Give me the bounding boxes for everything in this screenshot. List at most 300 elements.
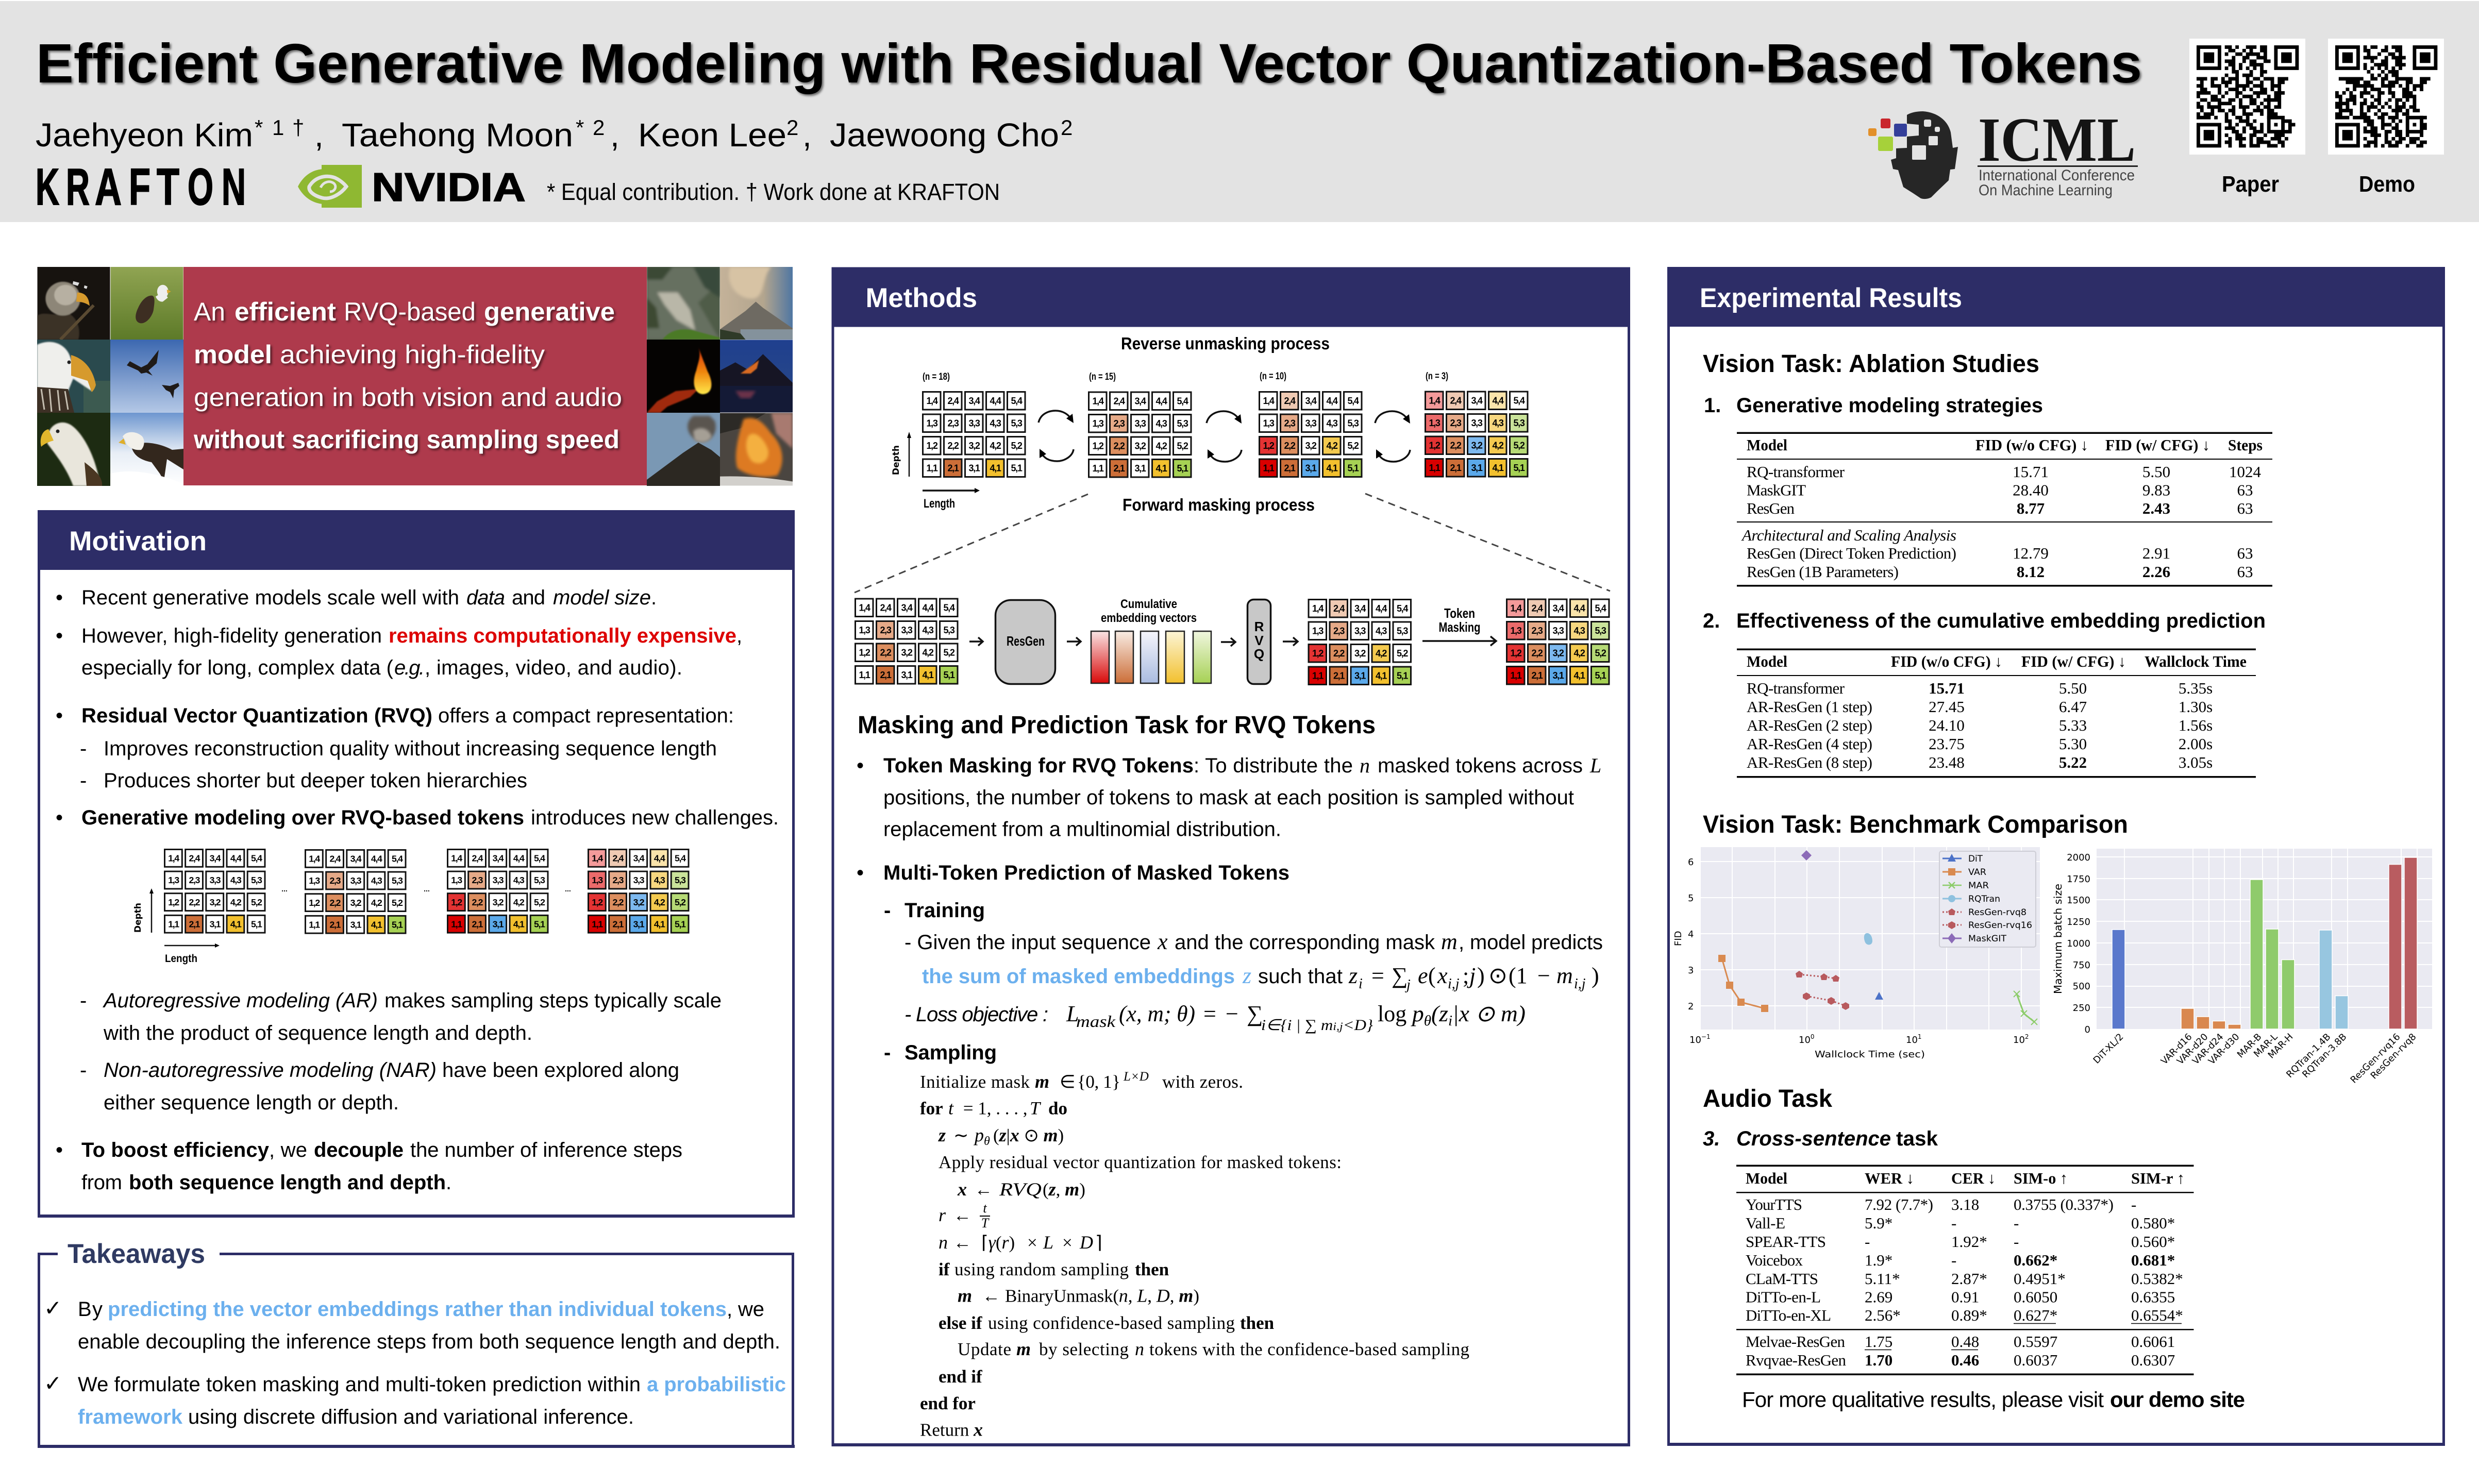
grid: autoregressive state 1: 3,4 [210,853,221,864]
grid: autoregressive state 2: 5,2 [392,898,403,908]
series: resgen-rvq16 [1803,992,1849,1010]
grid: n = 3: 5,3 [1513,418,1525,428]
authors: Keon Lee [638,116,786,154]
table: cross-sentence task: SIM-o ↑ [2014,1169,2068,1187]
panel: experimental results [1667,267,2445,1446]
legend: VAR [1968,867,1986,878]
bars: cumulative embedding vectors [1091,631,1211,683]
table: cumulative embedding prediction: AR-ResGen (2 step) [1747,716,1872,734]
header band [0,1,2479,222]
axis: length: Length [924,497,955,511]
grid: pipeline input: 1,2 [859,647,870,657]
grid: autoregressive state 1: 5,1 [251,919,262,929]
series: mar [2014,991,2037,1025]
algorithm: sampling: by selecting [1039,1339,1129,1359]
grid: n = 15: 4,2 [1155,441,1167,451]
grid: autoregressive state 2: 4,1 [371,919,382,930]
grid: n = 15: 1,3 [1092,418,1104,429]
takeaway 1 [44,1295,780,1353]
grid: pipeline input [856,599,958,684]
x axis model labels: DiT-XL/2 [2091,1032,2126,1066]
grid: autoregressive state 2: 5,1 [392,919,403,930]
axis: depth: Depth [891,445,901,475]
table: cross-sentence task: Model [1746,1169,1787,1187]
bars: var [2181,1008,2241,1029]
table: cross-sentence task: SIM-r ↑ [2131,1169,2185,1187]
arrow: resgen to vectors [1067,637,1081,646]
algorithm: sampling: Return [920,1420,974,1440]
arrow: input to resgen [969,637,983,646]
text: token masking: L [1589,754,1601,777]
algorithm: sampling: x [957,1179,967,1200]
grid: autoregressive state 1: 5,4 [251,853,262,864]
grid: n = 10: 3,3 [1305,418,1317,429]
grid: autoregressive state 4: 1,3 [592,875,603,885]
grid: pipeline masked: 5,4 [1595,603,1606,613]
heading: vision task benchmark comparison: Vision Task: Benchmark Comparison [1703,811,2128,838]
red summary box [183,267,647,485]
grid: n = 18: 1,3 [926,418,938,429]
takeaway 1: By [78,1298,103,1321]
table: cross-sentence task: 0.5382* [2131,1270,2183,1288]
table: cumulative embedding prediction: 2.00s [2179,735,2213,753]
authors: 2 [593,115,605,140]
grid: n = 3: 3,2 [1471,440,1483,450]
grid: autoregressive state 4: 2,1 [612,919,624,929]
motivation text block 1: . [651,586,657,609]
grid: autoregressive state 3: 1,3 [451,875,462,885]
grid: autoregressive state 3: 3,2 [493,897,504,907]
grid: autoregressive state 3: 2,4 [472,853,483,864]
table: cross-sentence task: Vall-E [1746,1214,1785,1232]
grid: autoregressive state 1: 5,3 [251,875,262,885]
text: multi-token prediction: ∑ [1392,963,1408,988]
x axis model labels: RQTran-3.8B [2300,1032,2349,1080]
algorithm: sampling: then [1240,1313,1274,1333]
text: multi-token prediction: ) [1477,963,1485,988]
table: cross-sentence task: WER ↓ [1865,1169,1914,1187]
text: multi-token prediction: θ [1424,1013,1431,1029]
table: cross-sentence task: 0.5597 [2014,1333,2057,1351]
grid: autoregressive state 4: 3,1 [633,919,645,929]
algorithm: sampling: ( [1043,1179,1049,1200]
algorithm: sampling: tokens with the confidence-based sampling [1149,1339,1469,1359]
text: token masking [857,754,1601,841]
algorithm: sampling: z|x ⊙ m) [999,1125,1064,1145]
motivation text block 2: either sequence length or depth. [104,1091,399,1114]
grid: autoregressive state 2: 2,3 [329,875,341,886]
heading: cross-sentence task: Cross-sentence [1736,1127,1891,1150]
photo: volcano 3 [647,340,720,413]
grid: n = 3: 2,4 [1450,396,1462,406]
grid: autoregressive state 2: 1,2 [309,898,320,908]
grid: n = 18: 5,3 [1011,418,1023,429]
text: multi-token prediction: j [1405,977,1411,993]
algorithm: sampling [920,1070,1469,1440]
table: cumulative embedding prediction: 24.10 [1929,716,1965,734]
grid: pipeline input: 2,4 [880,603,892,613]
text: multi-token prediction: z [1242,963,1251,988]
heading: motivation: Motivation [69,526,207,556]
table: cross-sentence task: 7.92 (7.7*) [1865,1195,1933,1213]
grid: pipeline masked: 2,2 [1531,648,1543,659]
grid: autoregressive state 2: 4,3 [371,875,382,886]
motivation text block 2: - [80,989,87,1012]
legend: ResGen-rvq16 [1968,920,2032,931]
algorithm: sampling: {0, 1} [1077,1072,1120,1092]
text: multi-token prediction: i∈{i | ∑ m i,j<D} [1261,1017,1373,1034]
arrows: cycle 1 [1038,411,1074,461]
table: cumulative embedding prediction: Model [1747,652,1787,670]
grid: pipeline input: 3,1 [901,670,913,680]
chart: fid vs wallclock scatter [1673,847,2040,1060]
text: multi-token prediction: log [1378,1001,1406,1026]
authors: * [576,115,584,140]
logo: nvidia [298,164,526,210]
heading: cross-sentence task: task [1896,1127,1938,1150]
grid: pipeline input: 1,1 [859,670,870,680]
logo: ICML: ICML [1978,105,2136,175]
x axis ticks: 10 [1799,1035,1811,1045]
algorithm: sampling: BinaryUnmask( [1005,1286,1119,1306]
grid: n = 18 [923,392,1025,477]
grid: autoregressive state 3: 1,2 [451,897,462,907]
grid: n = 3: 1,4 [1429,396,1440,406]
table: generative modeling strategies: 5.50 [2142,463,2170,481]
motivation text block 2: • [56,1139,63,1161]
table: cross-sentence task: 0.91 [1951,1288,1979,1306]
grid: autoregressive state 3: 4,4 [513,853,525,864]
ellipsis markers: ... [424,885,430,893]
grid: autoregressive state 4: 5,3 [675,875,686,885]
motivation text block 1: - [80,769,87,792]
heading: takeaways: Takeaways [68,1239,205,1269]
grid: pipeline input: 3,3 [901,625,913,635]
logo: krafton: A [95,158,122,216]
grid: autoregressive state 4: 1,2 [592,897,603,907]
text: multi-token prediction: Sampling [904,1041,997,1064]
grid: n = 18: 5,4 [1011,396,1023,406]
grid: autoregressive state 3: 2,1 [472,919,483,929]
algorithm: sampling: RVQ [999,1179,1042,1200]
grid: n = 18: 5,2 [1011,441,1023,451]
photo: eagle 4 [110,340,183,413]
motivation text block 1: Recent generative models scale well with [81,586,459,609]
table: generative modeling strategies: 2.26 [2142,563,2170,581]
grid: pipeline masked: 2,4 [1531,603,1543,613]
table: cross-sentence task [1736,1165,2193,1375]
grid: pipeline output: 4,4 [1376,603,1387,614]
heading: masking and prediction task: Masking and Prediction Task for RVQ Tokens [858,712,1376,739]
authors: Taehong Moon [342,116,573,154]
grid: autoregressive state 4: 5,4 [675,853,686,864]
grid: autoregressive state 4: 4,3 [654,875,665,885]
grid: n = 3: 5,4 [1513,396,1525,406]
text: multi-token prediction: m [1556,963,1573,988]
table: cumulative embedding prediction: 23.48 [1929,753,1965,771]
box: resgen [996,600,1056,684]
grid: autoregressive state 3: 3,3 [493,875,504,885]
grid: autoregressive state 3 [447,849,548,933]
table: generative modeling strategies: 63 [2237,563,2253,581]
grid: pipeline input: 4,2 [922,647,934,657]
algorithm: sampling: end for [920,1393,976,1413]
ellipsis markers: ... [281,885,288,893]
table: cross-sentence task: 0.662* [2014,1251,2057,1269]
axis: depth [133,888,154,933]
table: cross-sentence task: 0.6050 [2014,1288,2057,1306]
logo: krafton: R [66,158,90,216]
text: multi-token prediction: ( [1428,963,1436,988]
algorithm: sampling: D [1079,1232,1093,1253]
logo: nvidia: NVIDIA [372,164,526,210]
grid: pipeline masked: 5,3 [1595,626,1606,636]
grid: pipeline input: 2,1 [880,670,892,680]
grid: autoregressive state 2 [305,850,406,933]
grid: autoregressive state 4: 3,4 [633,853,645,864]
table: generative modeling strategies: FID (w/ CFG) ↓ [2105,436,2210,454]
footnote: * Equal contribution. † Work done at KRAFTON [547,179,1000,205]
ellipsis markers: ... [565,885,571,893]
arrows: cycle 3 [1375,411,1410,462]
algorithm: sampling: m [958,1285,972,1306]
algorithm: sampling: ⌈ [981,1233,989,1253]
authors [36,115,1073,154]
x axis title: Wallclock Time (sec) [1815,1049,1925,1060]
y axis ticks: 1250 [2067,917,2090,927]
grid: n = 18: 3,4 [968,396,980,406]
motivation text block 1: remains computationally expensive [389,625,736,647]
motivation text block 2: . [446,1171,451,1194]
table: cross-sentence task: 0.627* [2014,1306,2057,1324]
note: demo site: our demo site [2110,1387,2245,1412]
takeaway 1: predicting the vector embeddings rather than individual tokens [108,1298,727,1321]
table: generative modeling strategies [1737,432,2272,586]
algorithm: sampling: Update [958,1339,1011,1359]
motivation text block 1: data [466,586,505,609]
grid: n = 15: 4,1 [1155,463,1167,474]
grid: pipeline masked: 1,1 [1510,670,1522,681]
panel: methods [832,267,1630,1446]
algorithm: sampling: with zeros. [1162,1072,1243,1092]
algorithm: sampling: ← [982,1286,1000,1306]
table: cross-sentence task: - [1951,1251,1956,1269]
table: cumulative embedding prediction: 5.22 [2059,753,2087,771]
grid: autoregressive state 2: 4,2 [371,898,382,908]
table: cumulative embedding prediction: 5.50 [2059,679,2087,697]
text: token masking: Token Masking for RVQ Tokens [883,754,1194,777]
grid: pipeline masked: 4,2 [1573,648,1585,659]
table: generative modeling strategies: FID (w/o CFG) ↓ [1975,436,2088,454]
grid: n = 18: 2,4 [947,396,959,406]
x axis ticks: 10 [1689,1035,1701,1045]
label: token masking: Token [1444,605,1475,621]
table: generative modeling strategies: 63 [2237,544,2253,562]
text: multi-token prediction: p [1412,1001,1423,1026]
grid: autoregressive state 1 [164,849,265,933]
takeaway 2: a probabilistic [647,1373,786,1396]
label: cumulative embedding vectors: Cumulative [1120,597,1177,611]
motivation text block 1: , [736,625,742,647]
motivation text block 1: • [56,704,63,727]
table: cumulative embedding prediction: Wallclock Time [2145,652,2247,670]
grid: pipeline masked: 2,1 [1531,670,1543,681]
table: generative modeling strategies: 1024 [2229,463,2262,481]
text: multi-token prediction: − [1537,963,1550,988]
grid: autoregressive state 1: 5,2 [251,897,262,907]
algorithm: sampling: ∈ [1060,1072,1075,1092]
grid: pipeline output: 3,2 [1354,648,1366,659]
grid: pipeline input: 1,4 [859,603,870,613]
x axis model labels: RQTran-1.4B [2284,1032,2333,1080]
grid: n = 10: 5,2 [1347,441,1359,451]
algorithm: sampling: T [981,1216,990,1230]
algorithm: sampling: z [937,1125,946,1145]
heading: generative modeling strategies: 1. [1704,394,1721,417]
photo: eagle 5 [37,413,110,486]
photo: volcano 2 [720,267,793,340]
photo: volcano 5 [647,413,720,486]
grid: pipeline output: 3,3 [1354,626,1366,636]
legend: MAR [1968,881,1989,891]
algorithm: sampling: z, m) [1049,1179,1085,1200]
algorithm: sampling: using random sampling [954,1259,1129,1279]
table: generative modeling strategies: ResGen [1747,499,1795,517]
table: generative modeling strategies: Model [1747,436,1787,454]
y axis ticks [2067,852,2090,1035]
grid: n = 3: 1,3 [1429,418,1440,428]
authors: Jaehyeon Kim [36,116,253,154]
text: token masking: positions, the number of tokens to mask at each position is sampled without [883,786,1574,809]
x axis model labels: VAR-d20 [2175,1032,2210,1067]
table: generative modeling strategies: 9.83 [2142,481,2170,499]
grid: autoregressive state 1: 2,4 [189,853,200,864]
x axis model labels: ResGen-rvq16 [2349,1032,2403,1086]
x axis model labels: MAR-L [2252,1032,2280,1059]
motivation text block 1: e.g. [394,656,425,679]
logo: krafton: F [129,158,150,216]
table: cross-sentence task: 0.4951* [2014,1270,2066,1288]
legend: MaskGIT [1968,934,2007,944]
panel: motivation [38,510,795,1218]
table: cumulative embedding prediction: AR-ResGen (8 step) [1747,753,1872,771]
y axis ticks: 1500 [2067,895,2090,906]
text: multi-token prediction: - Given the input sequence [904,931,1151,954]
grid: n = 3: 5,1 [1513,463,1525,473]
text: multi-token prediction [857,862,1603,1064]
grid: autoregressive state 1: 2,1 [189,919,200,929]
label: token masking [1439,605,1480,635]
table: generative modeling strategies: 28.40 [2013,481,2049,499]
table: cumulative embedding prediction: 6.47 [2059,698,2087,716]
table: cross-sentence task: 0.89* [1951,1306,1987,1324]
summary text: achieving high-fidelity [280,340,545,369]
heading: cross-sentence task [1703,1127,1938,1150]
ellipsis markers [281,885,571,893]
y axis ticks: 500 [2073,981,2090,992]
takeaway 2: using discrete diffusion and variational inference. [188,1406,634,1428]
grid: n = 10 [1260,392,1362,477]
takeaway 2: We formulate token masking and multi-token prediction within [78,1373,641,1396]
grid: pipeline output: 2,3 [1333,626,1345,636]
algorithm: sampling: m [1035,1071,1049,1092]
summary text: efficient [234,297,336,326]
algorithm: sampling: T [1030,1098,1042,1118]
grid: n = 10: 3,1 [1305,463,1317,473]
grid: n = 15: 2,4 [1113,396,1125,406]
grid: autoregressive state 1: 3,2 [210,897,221,907]
text: token masking: : To distribute the [1194,754,1353,777]
table: cross-sentence task: 0.681* [2131,1251,2175,1269]
table: cumulative embedding prediction: FID (w/ CFG) ↓ [2021,652,2126,670]
table: cumulative embedding prediction: 27.45 [1929,698,1965,716]
grid: pipeline masked: 1,3 [1510,626,1522,636]
text: multi-token prediction: e [1418,963,1428,988]
grid: autoregressive state 3: 1,4 [451,853,462,864]
algorithm: sampling: ⌉ [1095,1233,1102,1253]
table: cumulative embedding prediction: 5.33 [2059,716,2087,734]
grid: n = 3: 4,2 [1492,440,1504,450]
y axis ticks: 3 [1688,965,1694,976]
authors: 2 [786,115,798,140]
x axis model labels: VAR-d24 [2190,1032,2226,1067]
takeaway 1: , we [727,1298,764,1321]
text: multi-token prediction: − [1226,1001,1238,1026]
arrows: cycle 2 [1207,411,1242,462]
grid: n = 18: 2,3 [947,418,959,429]
motivation text block 2: the number of inference steps [410,1139,682,1161]
grid: pipeline output: 4,2 [1376,648,1387,659]
arrow: rvq to output [1283,637,1298,646]
grid: autoregressive state 4: 2,4 [612,853,624,864]
series: rqtran [1864,933,1872,945]
grid: n = 10: 3,2 [1305,441,1317,451]
algorithm: sampling: = 1, . . . , [959,1099,1032,1118]
motivation text block 1: • [56,625,63,647]
table: cross-sentence task: - [2014,1214,2019,1232]
text: multi-token prediction: , model predicts [1459,931,1603,954]
chart: maximum batch size bars [2052,849,2432,1086]
motivation text block 2: have been explored along [442,1059,679,1082]
text: multi-token prediction: Multi-Token Prediction of Masked Tokens [883,862,1289,884]
grid: autoregressive state 1: 3,3 [210,875,221,885]
table: cross-sentence task: - [1865,1233,1870,1251]
grid: n = 18: 1,4 [926,396,938,406]
grid: autoregressive state 3: 4,2 [513,897,525,907]
summary text: RVQ-based [344,297,476,326]
grid: n = 15: 1,1 [1092,463,1104,474]
algorithm: sampling: t [948,1098,954,1118]
box: rvq: Q [1254,646,1264,662]
grid: autoregressive state 4: 1,4 [592,853,603,864]
grid: n = 10: 4,4 [1326,396,1338,406]
grid: pipeline output: 5,2 [1397,648,1408,659]
arrow: token masking [1422,636,1496,646]
table: cross-sentence task: CLaM-TTS [1746,1270,1818,1288]
dashed zoom line right [1365,494,1610,591]
grid: autoregressive state 4: 2,3 [612,875,624,885]
text: multi-token prediction: ; [1463,963,1469,988]
table: generative modeling strategies: 63 [2237,499,2253,517]
series: maskgit [1801,850,1812,861]
grid: n = 18: 3,1 [968,463,980,473]
text: multi-token prediction: Training [904,899,985,922]
text: multi-token prediction: |x ⊙ m) [1452,1001,1526,1026]
takeaway 1: ✓ [44,1295,62,1321]
text: multi-token prediction: = [1371,963,1384,988]
logo: ICML [1868,105,2138,199]
grid: n = 15: 4,4 [1155,396,1167,406]
